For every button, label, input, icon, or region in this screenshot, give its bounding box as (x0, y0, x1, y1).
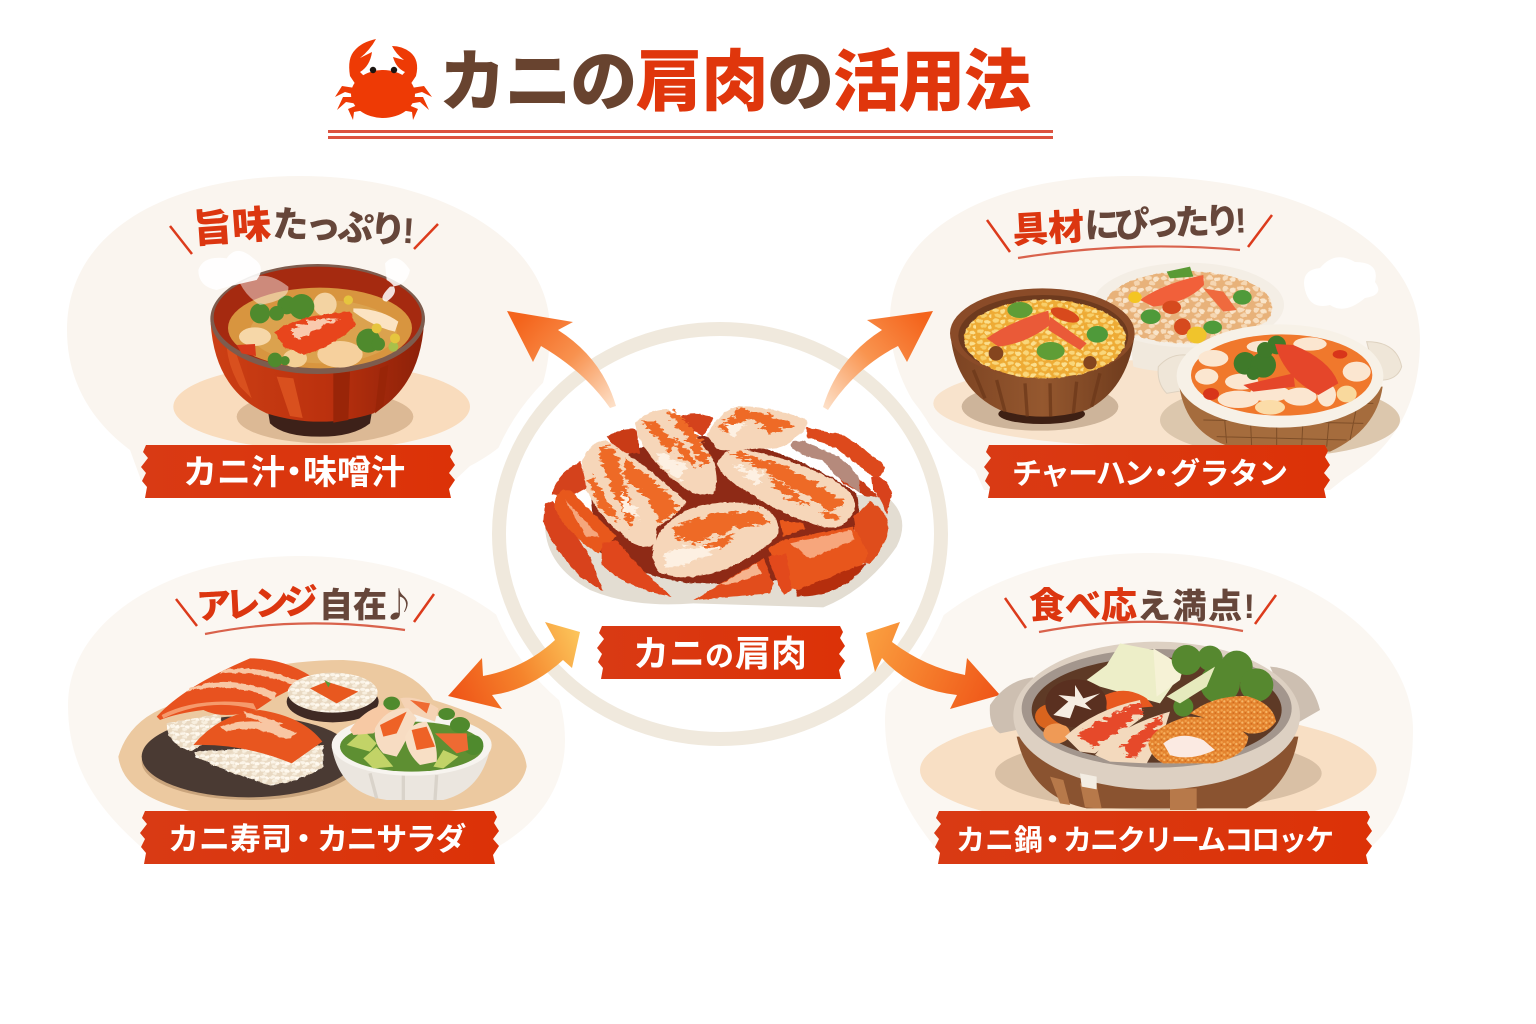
back plate (1130, 337, 1250, 371)
panel background: sushi and salad (68, 556, 565, 846)
panel: umami soup (141, 203, 470, 498)
catchphrase: 食べ応 (1029, 585, 1137, 626)
illustration: bowl of soup (173, 251, 470, 450)
arrow: to soup (507, 311, 616, 408)
catchphrase: え満点! (1137, 588, 1255, 626)
center label (597, 626, 845, 679)
catchphrase: 具材 (1011, 206, 1085, 251)
panel background: umami soup (67, 176, 550, 480)
icon: crab (335, 39, 432, 120)
catchphrase: 自在♪ (319, 578, 416, 627)
catchphrase: 旨味 (192, 204, 272, 252)
title group (328, 39, 1053, 139)
panel: hot pot and croquette (920, 585, 1377, 864)
panel: sushi and salad (118, 578, 527, 864)
catchphrase (987, 201, 1272, 258)
label (934, 811, 1372, 864)
catchphrase (176, 578, 434, 634)
label (984, 445, 1330, 498)
steam puff (1304, 257, 1378, 309)
illustration: hot pot (920, 642, 1377, 830)
left bowl (998, 404, 1085, 424)
label: カニ鍋・カニクリームコロッケ (956, 824, 1332, 857)
panel background: fried rice and gratin (890, 176, 1420, 490)
gratin dish (1158, 355, 1187, 393)
label: カニ汁・味噌汁 (183, 454, 405, 492)
arrow: double, sushi (448, 622, 580, 709)
heading: カニの肩肉の活用法 (439, 45, 1031, 120)
catchphrase (170, 203, 438, 254)
label: チャーハン・グラタン (1012, 458, 1287, 491)
center label: カニの肩肉 (633, 633, 807, 674)
panel background: hot pot and croquette (885, 553, 1413, 846)
catchphrase (1005, 585, 1276, 632)
catchphrase: アレンジ (195, 582, 319, 627)
illustration: crab shoulder meat (543, 406, 902, 607)
illustration: crab sushi and salad (118, 658, 527, 812)
label (140, 811, 499, 864)
center halo (480, 310, 960, 758)
meat pieces (582, 440, 687, 547)
illustration: fried rice and gratin (933, 263, 1402, 457)
label (141, 445, 455, 498)
center ring (499, 329, 941, 739)
label: カニ寿司・カニサラダ (168, 822, 466, 857)
catchphrase: にぴったり! (1084, 201, 1247, 246)
panel: fried rice and gratin (933, 201, 1402, 498)
arrow: to fried rice (823, 311, 933, 410)
arrow: double, hot pot (866, 622, 1000, 709)
catchphrase: たっぷり! (272, 203, 416, 251)
